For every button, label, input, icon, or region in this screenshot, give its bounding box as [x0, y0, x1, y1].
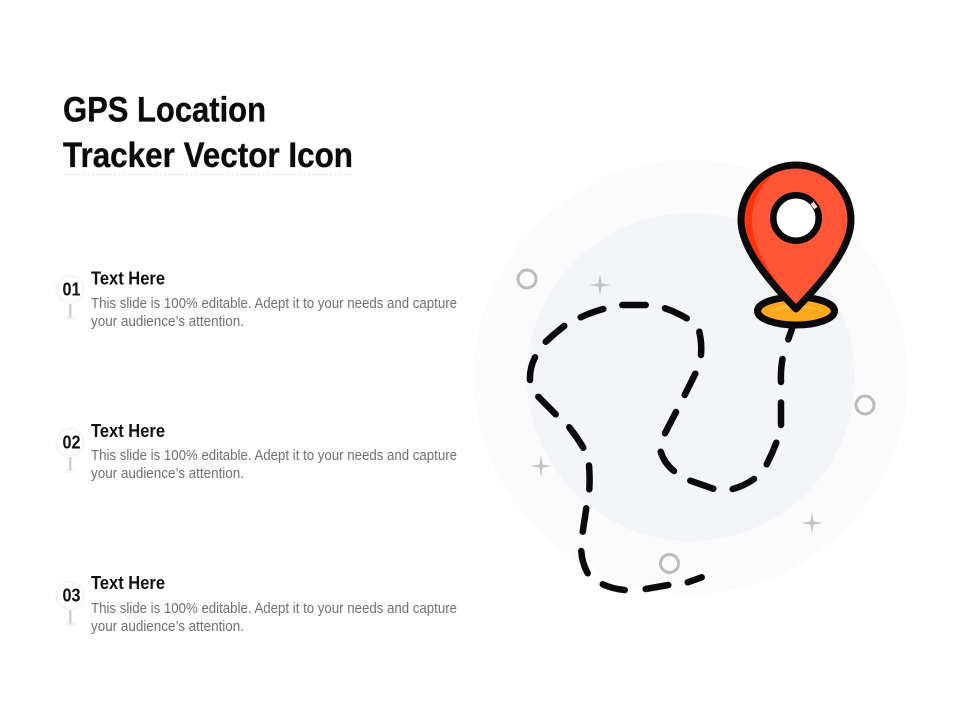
background circles — [474, 160, 908, 594]
pin body — [741, 165, 851, 309]
marker 03: 03 — [62, 584, 80, 606]
list item 02 — [56, 421, 457, 482]
marker 01 — [56, 276, 84, 319]
dashed route — [530, 305, 793, 590]
body 03: your audience’s attention. — [91, 618, 244, 635]
decorative rings — [518, 270, 874, 572]
marker 02 — [56, 428, 84, 472]
pin base ellipse — [758, 297, 834, 325]
list item 03 — [56, 573, 457, 635]
location pin — [741, 165, 851, 325]
body 01: your audience’s attention. — [91, 313, 244, 330]
body 03 — [91, 600, 457, 635]
body 02: This slide is 100% editable. Adept it to your needs and capture — [91, 447, 457, 464]
list item 01 — [56, 268, 457, 330]
heading 03: Text Here — [91, 573, 165, 593]
illustration: GPS tracker — [474, 160, 908, 594]
title — [63, 90, 353, 175]
body 02: your audience’s attention. — [91, 465, 244, 482]
title: GPS Location — [63, 90, 266, 130]
marker 02: 02 — [62, 432, 80, 452]
body 02 — [91, 447, 457, 482]
heading 01: Text Here — [91, 268, 165, 288]
marker 03 — [56, 582, 84, 625]
title: Tracker Vector Icon — [63, 136, 353, 175]
heading 02: Text Here — [91, 421, 165, 441]
decorative sparkles — [530, 274, 823, 534]
body 01: This slide is 100% editable. Adept it to your needs and capture — [91, 295, 457, 312]
marker 01: 01 — [62, 278, 80, 300]
body 03: This slide is 100% editable. Adept it to your needs and capture — [91, 600, 457, 617]
pin center ring — [773, 195, 819, 241]
body 01 — [91, 295, 457, 330]
